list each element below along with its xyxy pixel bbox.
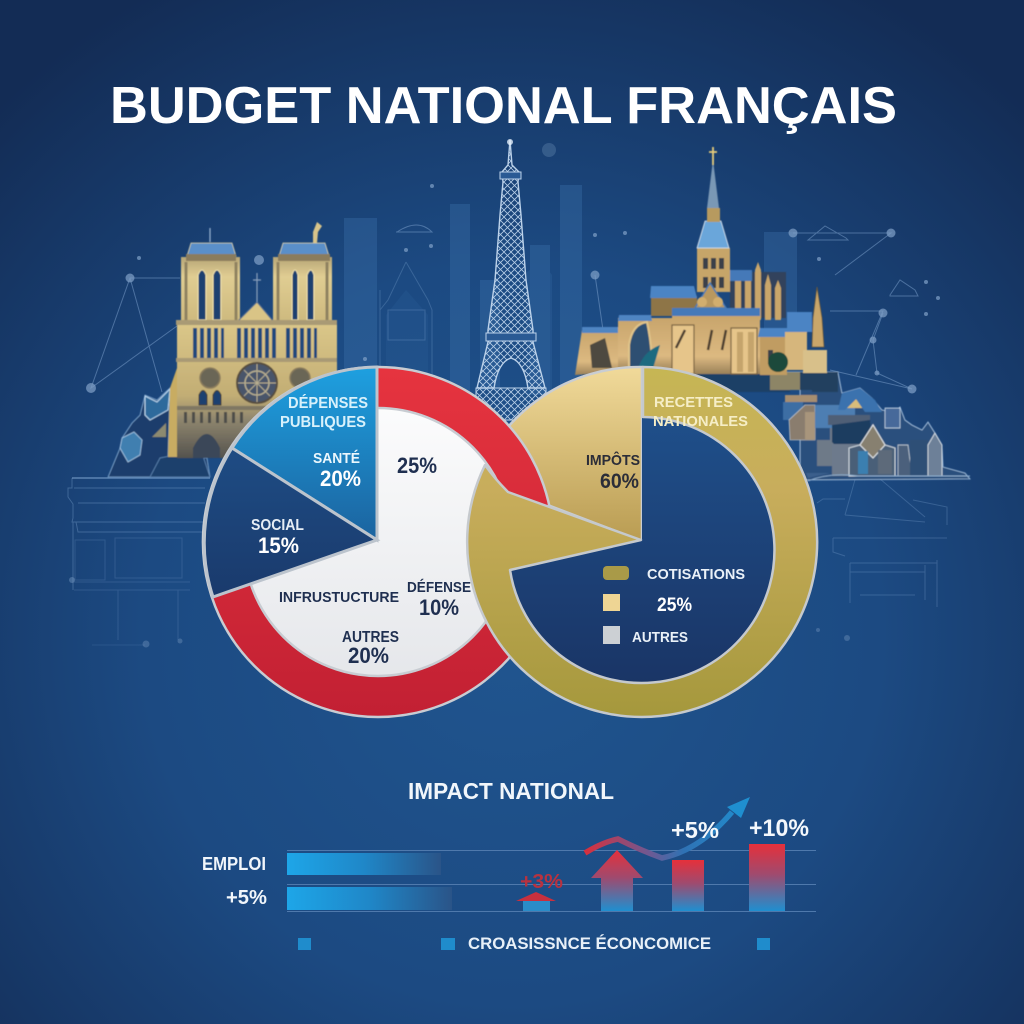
labels: 60% <box>600 470 639 493</box>
small arrow +3%: +3% <box>520 871 563 893</box>
blue slice: santé <box>232 367 377 540</box>
bar +10% <box>749 844 785 911</box>
value labels: +10% <box>749 815 809 842</box>
legend: COTISATIONS <box>647 566 745 583</box>
labels <box>251 395 471 668</box>
icon: Mont-Saint-Michel <box>575 147 970 481</box>
red ring <box>203 367 553 717</box>
apse <box>730 272 786 318</box>
panel: dépenses publiques pie <box>203 367 553 717</box>
labels: SOCIAL <box>251 517 304 534</box>
horizontal bars <box>287 853 452 910</box>
bar +5% <box>672 860 704 911</box>
main walls <box>618 318 672 372</box>
labels: IMPÔTS <box>586 451 640 469</box>
labels: 10% <box>419 595 459 620</box>
emploi labels: +5% <box>226 887 267 909</box>
village mass <box>760 372 970 480</box>
labels: AUTRES <box>342 629 399 646</box>
legend: AUTRES <box>632 629 688 646</box>
constellations <box>69 143 940 648</box>
central tower <box>697 248 730 292</box>
labels: DÉPENSES <box>288 395 368 412</box>
labels: 20% <box>320 466 361 491</box>
labels: DÉFENSE <box>407 579 471 596</box>
value labels: +5% <box>671 817 719 843</box>
large arrow <box>591 850 643 911</box>
trend arrow <box>585 797 750 858</box>
labels: 15% <box>258 533 299 558</box>
white disc <box>204 368 552 716</box>
side wall <box>168 368 177 457</box>
facade <box>177 320 337 458</box>
panel: recettes nationales ring <box>467 367 817 717</box>
gold ring <box>467 367 817 717</box>
legend <box>603 566 745 646</box>
value labels <box>671 815 809 843</box>
legend: CROASISSNCE ÉCONCOMICE <box>468 934 711 953</box>
left lower wall <box>575 330 620 375</box>
labels: 25% <box>397 453 437 478</box>
right section <box>760 337 787 375</box>
ghost outline: right pediment <box>817 462 947 607</box>
navy centre <box>510 417 774 683</box>
central houses with diamond <box>849 425 895 476</box>
painted block <box>770 372 800 390</box>
panel: recettes cream sector (behind left pie) <box>477 367 642 541</box>
icon: Eiffel Tower <box>476 139 546 420</box>
small arrow +3% <box>516 871 563 911</box>
rose windows <box>237 363 277 403</box>
ghost church outline <box>380 262 432 375</box>
navy slice: social <box>204 448 377 597</box>
heading: IMPACT NATIONAL <box>408 778 614 804</box>
icon: Notre-Dame cathedral <box>108 222 337 477</box>
emploi labels <box>202 854 267 909</box>
ghost skyline <box>344 185 797 408</box>
spire <box>707 160 719 222</box>
left rocks <box>108 388 210 477</box>
emploi labels: EMPLOI <box>202 854 266 874</box>
ghost outline: Arc de Triomphe <box>68 478 210 645</box>
panel: impact national <box>202 778 816 953</box>
upper block <box>651 296 697 316</box>
labels: PUBLIQUES <box>280 414 366 431</box>
labels: NATIONALES <box>653 413 748 430</box>
labels <box>586 394 748 493</box>
title: BUDGET NATIONAL FRANÇAIS <box>110 77 897 135</box>
labels: 20% <box>348 643 389 668</box>
legend: 25% <box>657 595 692 616</box>
labels: SANTÉ <box>313 450 360 467</box>
legend <box>298 934 770 953</box>
labels: INFRUSTUCTURE <box>279 589 399 606</box>
labels: RECETTES <box>654 394 733 411</box>
